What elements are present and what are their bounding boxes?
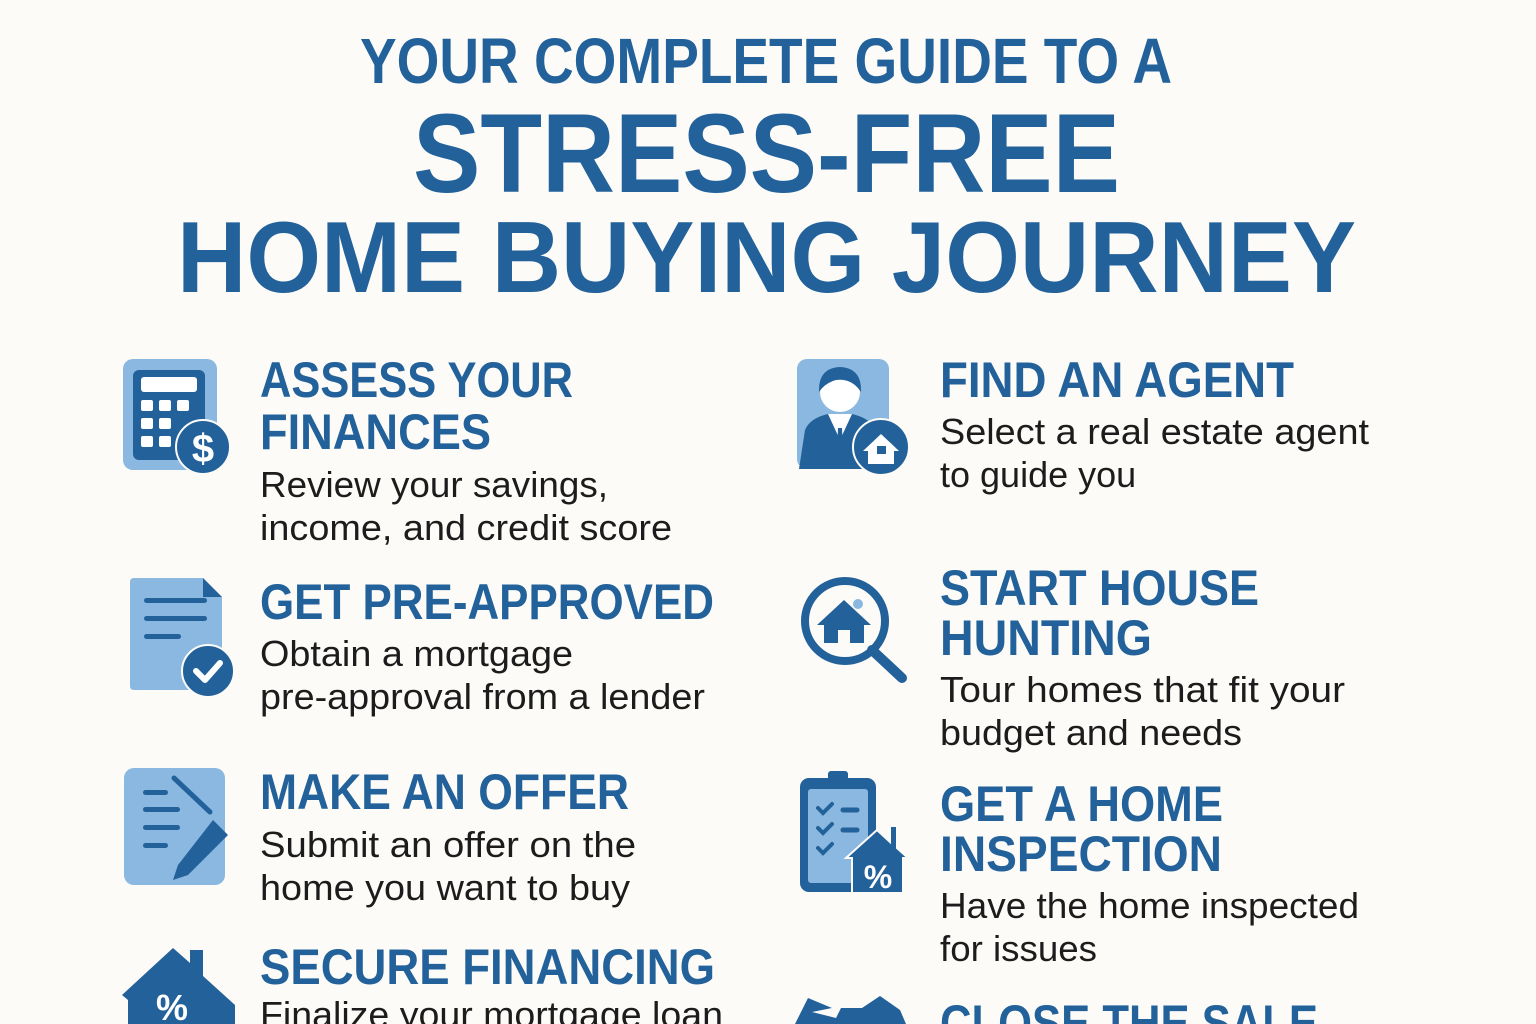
- heading: inspection: GET A HOME: [940, 776, 1223, 832]
- heading: inspection: [940, 776, 1223, 882]
- text: inspection: [940, 885, 1359, 969]
- text: assess: income, and credit score: [260, 507, 672, 548]
- text: inspection: for issues: [940, 928, 1097, 969]
- text: hunting: [940, 669, 1345, 753]
- icon: calculator: $: [192, 427, 214, 471]
- title: [177, 25, 1356, 314]
- heading: assess: FINANCES: [260, 404, 491, 460]
- icon: calculator: [123, 359, 230, 474]
- text: assess: [260, 464, 672, 548]
- title: YOUR COMPLETE GUIDE TO A: [360, 25, 1172, 97]
- heading: hunting: START HOUSE: [940, 560, 1259, 616]
- heading: agent: FIND AN AGENT: [940, 352, 1294, 408]
- icon: clipboard: %: [864, 859, 892, 895]
- icon: agent: [797, 359, 909, 475]
- icon: house percent: [122, 948, 235, 1024]
- text: offer: home you want to buy: [260, 867, 630, 908]
- text: hunting: budget and needs: [940, 712, 1242, 753]
- text: offer: Submit an offer on the: [260, 824, 636, 865]
- heading: assess: [260, 352, 573, 460]
- text: agent: to guide you: [940, 454, 1136, 495]
- text: hunting: Tour homes that fit your: [940, 669, 1345, 710]
- title: HOME BUYING JOURNEY: [177, 202, 1356, 314]
- icon: magnifier house: [805, 581, 902, 678]
- heading: hunting: [940, 560, 1259, 666]
- heading: assess: ASSESS YOUR: [260, 352, 573, 408]
- text: pre-approved: pre-approval from a lender: [260, 676, 705, 717]
- text: assess: Review your savings,: [260, 464, 608, 505]
- heading: hunting: HUNTING: [940, 610, 1152, 666]
- text: pre-approved: [260, 633, 705, 717]
- icon: handshake: [795, 996, 906, 1024]
- icon: clipboard: [800, 771, 908, 895]
- text: inspection: Have the home inspected: [940, 885, 1359, 926]
- text: pre-approved: Obtain a mortgage: [260, 633, 573, 674]
- text: offer: [260, 824, 636, 908]
- heading: pre-approved: GET PRE-APPROVED: [260, 574, 714, 630]
- icon: offer pad: [124, 768, 228, 885]
- icon: document check: [130, 578, 234, 697]
- text: agent: [940, 411, 1369, 495]
- text: agent: Select a real estate agent: [940, 411, 1369, 452]
- heading: offer: MAKE AN OFFER: [260, 764, 629, 820]
- heading: inspection: INSPECTION: [940, 826, 1222, 882]
- title: STRESS-FREE: [413, 91, 1120, 216]
- heading: financing: SECURE FINANCING: [260, 939, 715, 995]
